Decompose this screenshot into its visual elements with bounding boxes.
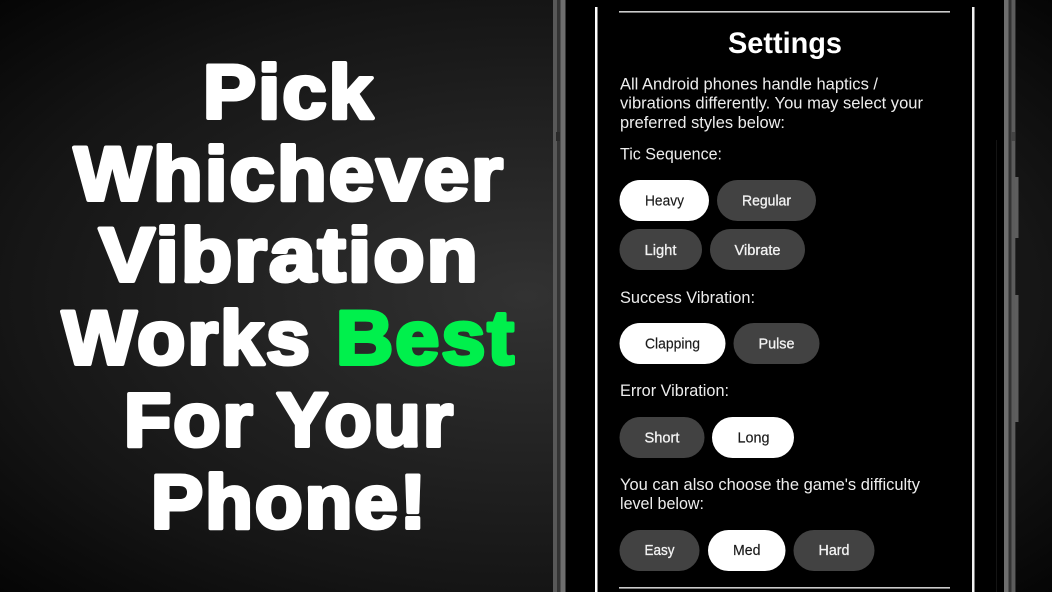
headline: Pick bbox=[203, 50, 375, 135]
bottom rule bbox=[619, 587, 950, 589]
label: tic sequence: Tic Sequence: bbox=[620, 144, 722, 164]
button: clapping bbox=[620, 323, 726, 364]
top rule bbox=[619, 11, 950, 13]
screen side lines bbox=[595, 7, 974, 592]
label: success vibration: Success Vibration: bbox=[620, 288, 755, 307]
intro text: vibrations differently. You may select your bbox=[620, 94, 923, 113]
difficulty text bbox=[620, 475, 920, 513]
button: clapping: Clapping bbox=[645, 336, 700, 352]
button: long: Long bbox=[738, 430, 770, 446]
intro text: All Android phones handle haptics / bbox=[620, 74, 878, 94]
headline: Whichever bbox=[74, 132, 505, 217]
headline: Best bbox=[336, 296, 516, 381]
button: vibrate bbox=[710, 229, 805, 270]
side button: power bbox=[1015, 295, 1018, 422]
side button: volume bbox=[1015, 177, 1018, 238]
button: heavy bbox=[620, 180, 709, 221]
headline bbox=[62, 50, 516, 545]
difficulty text: level below: bbox=[620, 494, 704, 513]
intro text: preferred styles below: bbox=[620, 113, 785, 132]
button: long bbox=[712, 417, 794, 458]
button: short: Short bbox=[644, 430, 680, 446]
intro text bbox=[620, 74, 923, 132]
headline: For Your bbox=[124, 378, 455, 463]
settings title: Settings bbox=[728, 27, 842, 60]
button: short bbox=[620, 417, 704, 458]
headline: Phone! bbox=[151, 460, 428, 545]
button: heavy: Heavy bbox=[645, 194, 685, 210]
button: light bbox=[620, 229, 702, 270]
button: pulse bbox=[734, 323, 820, 364]
phone frame bbox=[553, 0, 1016, 592]
button: med: Med bbox=[733, 543, 760, 559]
button: regular: Regular bbox=[742, 194, 791, 210]
button: regular bbox=[717, 180, 816, 221]
button: easy: Easy bbox=[644, 543, 675, 559]
phone bbox=[553, 0, 1018, 592]
button: light: Light bbox=[644, 243, 676, 259]
headline: Vibration bbox=[99, 213, 480, 298]
button: pulse: Pulse bbox=[758, 336, 794, 352]
button: vibrate: Vibrate bbox=[734, 243, 780, 259]
difficulty text: You can also choose the game's difficulty bbox=[620, 475, 920, 494]
button: easy bbox=[620, 530, 700, 571]
label: error vibration: Error Vibration: bbox=[620, 381, 729, 400]
button: hard: Hard bbox=[818, 543, 850, 559]
button: hard bbox=[794, 530, 874, 571]
button: med bbox=[708, 530, 786, 571]
screen bbox=[595, 7, 974, 592]
headline: Works bbox=[62, 296, 312, 381]
